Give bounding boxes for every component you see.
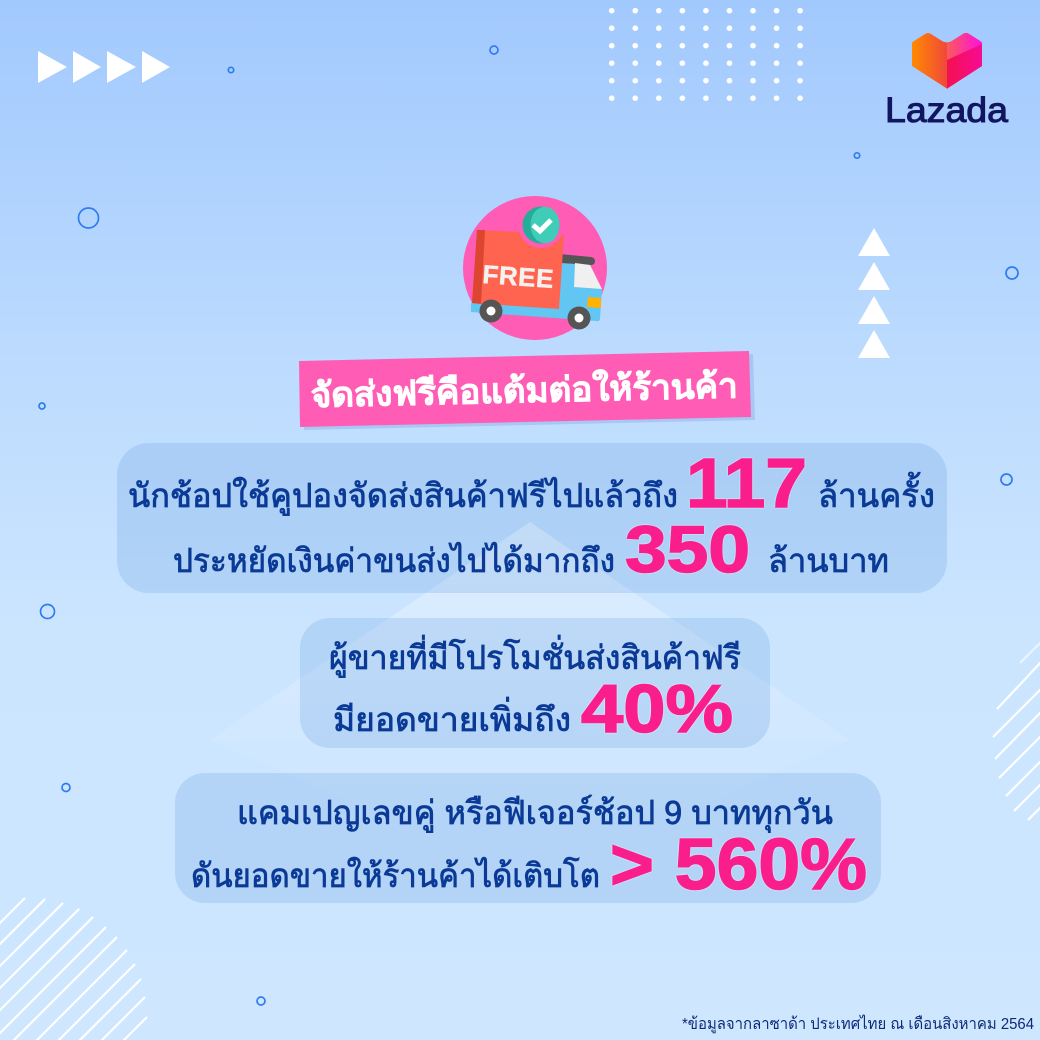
truck body	[471, 263, 602, 321]
banner background	[299, 351, 751, 427]
dot grid	[600, 2, 812, 107]
line one unit: ล้านครั้ง	[818, 472, 935, 514]
number 40%: 40%	[581, 671, 733, 747]
number over 560%: > 560%	[610, 825, 867, 905]
white stacked triangles	[858, 228, 890, 358]
number 117: 117	[686, 444, 807, 522]
truck cab roof	[560, 254, 595, 265]
logo wordmark: Lazada	[885, 91, 1009, 130]
panel background	[300, 618, 770, 748]
icon: free delivery truck	[463, 196, 607, 340]
diagonal lines bottom left	[0, 898, 147, 1040]
line two unit: ล้านบาท	[768, 542, 889, 579]
line one text: นักช้อปใช้คูปองจัดส่งสินค้าฟรีไปแล้วถึง	[128, 477, 678, 516]
Lazada logo	[885, 33, 1009, 130]
panel background	[175, 773, 881, 903]
line two text: ประหยัดเงินค่าขนส่งไปได้มากถึง	[173, 542, 615, 579]
banner shadow	[303, 354, 755, 430]
logo heart	[912, 33, 982, 89]
panel: seller promotion	[300, 618, 770, 748]
line two text: มียอดขายเพิ่มถึง	[333, 697, 571, 738]
line one text: แคมเปญเลขคู่ หรือฟีเจอร์ช้อป 9 บาททุกวัน	[237, 794, 833, 833]
truck window	[574, 263, 602, 289]
pink circle	[463, 196, 607, 340]
truck headlight	[587, 297, 601, 308]
wheels	[480, 300, 590, 330]
white play arrows	[38, 51, 170, 83]
banner heading	[299, 351, 755, 430]
panel background	[117, 443, 947, 593]
number 350: 350	[625, 512, 750, 586]
line two text: ดันยอดขายให้ร้านค้าได้เติบโต	[191, 857, 600, 894]
banner text: จัดส่งฟรีคือแต้มต่อให้ร้านค้า	[310, 365, 738, 415]
check badge	[518, 202, 564, 248]
panel: campaign	[175, 773, 881, 905]
darker cargo side	[472, 230, 485, 304]
panel: coupon stats	[117, 443, 947, 593]
FREE label: FREE	[482, 259, 555, 294]
pale centre glow	[210, 522, 850, 880]
red cargo box	[472, 230, 564, 309]
diagonal lines right edge	[993, 643, 1040, 820]
line one text: ผู้ขายที่มีโปรโมชั่นส่งสินค้าฟรี	[329, 635, 741, 678]
